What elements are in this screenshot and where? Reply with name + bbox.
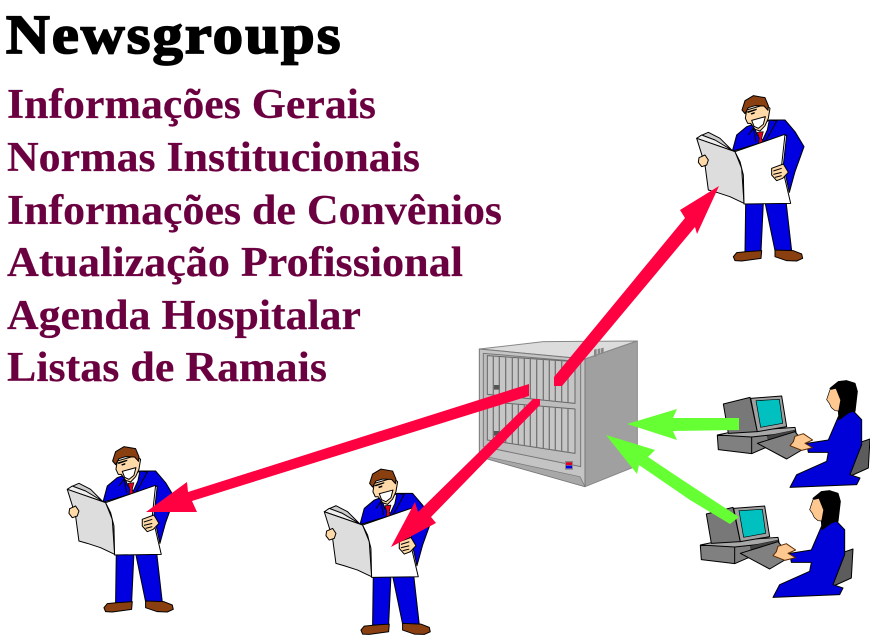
topic: Informações Gerais: Informações Gerais bbox=[7, 82, 376, 128]
workstation: lower bbox=[700, 491, 853, 597]
reader: bottom centre bbox=[324, 469, 432, 634]
topic list bbox=[7, 82, 502, 391]
topic: Informações de Convênios: Informações de Convênios bbox=[7, 188, 502, 234]
topic: Normas Institucionais: Normas Institucionais bbox=[7, 135, 420, 181]
topic: Agenda Hospitalar: Agenda Hospitalar bbox=[7, 293, 361, 339]
title: Newsgroups bbox=[6, 4, 340, 65]
reader: top right bbox=[697, 96, 804, 261]
arrow: server to bottom left reader bbox=[146, 384, 529, 512]
topic: Atualização Profissional: Atualização Profissional bbox=[7, 240, 463, 286]
topic: Listas de Ramais: Listas de Ramais bbox=[7, 345, 327, 391]
reader: bottom left bbox=[67, 447, 175, 612]
arrow: server to bottom centre reader bbox=[391, 399, 540, 547]
arrow: lower workstation to server bbox=[606, 435, 739, 524]
server cabinet bbox=[479, 341, 637, 487]
arrow: upper workstation to server bbox=[627, 409, 739, 440]
workstation: upper bbox=[717, 381, 870, 487]
arrow: server to top right reader bbox=[554, 186, 719, 386]
